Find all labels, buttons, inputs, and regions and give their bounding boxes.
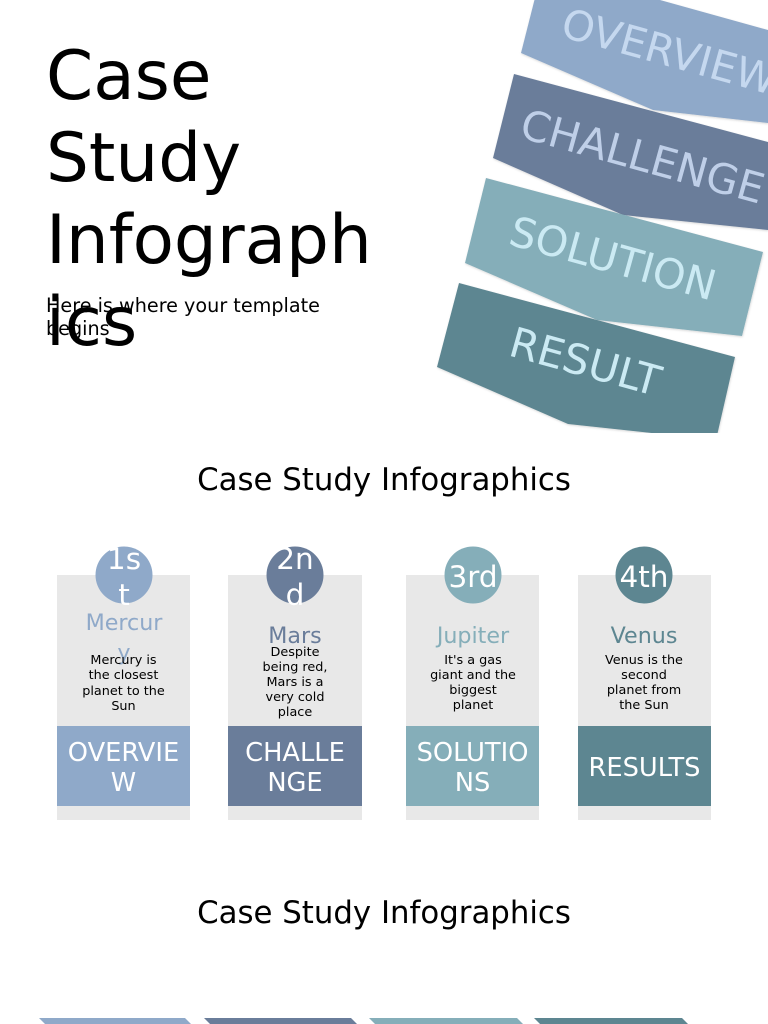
circle: 4th bbox=[616, 546, 672, 604]
ribbon: solution: SOLUTION bbox=[504, 206, 721, 310]
bottom tab: result bbox=[534, 1018, 694, 1024]
text: Mercury description: planet to the bbox=[82, 684, 165, 699]
bottom tab: overview bbox=[39, 1018, 197, 1024]
text: Mars description bbox=[263, 645, 327, 720]
text: Venus description: planet from bbox=[607, 683, 681, 698]
heading: first section: Case Study Infographics bbox=[197, 462, 571, 498]
title: Study bbox=[46, 118, 241, 197]
circle: 2nd: d bbox=[286, 578, 304, 612]
ribbon: solution bbox=[465, 178, 763, 336]
text: Mars description: Despite bbox=[271, 645, 320, 660]
band: challenge: CHALLE bbox=[245, 738, 345, 768]
name: Mercury bbox=[86, 610, 163, 666]
ribbon: result: RESULT bbox=[504, 317, 667, 406]
text: Venus description: the Sun bbox=[619, 698, 669, 713]
card: overview bbox=[57, 542, 190, 820]
band: challenge bbox=[228, 726, 362, 806]
text: Jupiter description: biggest bbox=[449, 683, 497, 698]
bottom tab: challenge bbox=[204, 1018, 363, 1024]
text: Venus description: second bbox=[621, 668, 667, 683]
band: solutions: NS bbox=[455, 768, 490, 798]
text: Mars description: Mars is a bbox=[266, 675, 324, 690]
card: challenge bbox=[228, 542, 362, 820]
name: Jupiter: Jupiter bbox=[435, 623, 510, 649]
title: Infograph bbox=[46, 200, 372, 279]
subtitle: Here is where your template bbox=[46, 294, 320, 317]
name: Venus: Venus bbox=[611, 623, 677, 649]
circle: 3rd: 3rd bbox=[448, 560, 498, 594]
text: Mars description: very cold bbox=[266, 690, 324, 705]
name: Mercury: y bbox=[117, 640, 131, 666]
bottom tab: solution bbox=[369, 1018, 529, 1024]
title: ics bbox=[46, 282, 137, 361]
title bbox=[46, 36, 372, 361]
card: solutions bbox=[406, 546, 539, 820]
text: Jupiter description: giant and the bbox=[430, 668, 516, 683]
ribbon: challenge bbox=[493, 74, 768, 230]
subtitle: begins bbox=[46, 317, 110, 340]
ribbon: result bbox=[437, 283, 735, 440]
text: Mercury description: the closest bbox=[89, 668, 158, 683]
band: overview: W bbox=[111, 768, 136, 798]
text: Venus description bbox=[605, 653, 683, 713]
circle: 3rd bbox=[444, 546, 502, 604]
text: Mars description: place bbox=[278, 705, 312, 720]
ribbon: challenge: CHALLENGE bbox=[515, 99, 768, 214]
band: results: RESULTS bbox=[589, 753, 700, 783]
band: challenge: NGE bbox=[267, 768, 323, 798]
text: Mercury description: Mercury is bbox=[90, 653, 157, 668]
text: Jupiter description: planet bbox=[453, 698, 493, 713]
heading: second section: Case Study Infographics bbox=[197, 895, 571, 931]
circle: 4th: 4th bbox=[619, 560, 669, 594]
title: Case bbox=[46, 36, 211, 115]
subtitle bbox=[46, 294, 320, 340]
text: Jupiter description bbox=[430, 653, 516, 713]
band: solutions bbox=[406, 726, 539, 806]
circle: 1st bbox=[96, 542, 152, 612]
text: Mercury description: Sun bbox=[111, 699, 136, 714]
band: results bbox=[578, 726, 711, 806]
band: overview bbox=[57, 726, 190, 806]
text: Mercury description bbox=[82, 653, 165, 714]
circle: 1st: 1s bbox=[107, 542, 141, 576]
name: Mars: Mars bbox=[268, 623, 322, 649]
text: Venus description: Venus is the bbox=[605, 653, 683, 668]
circle: 1st: t bbox=[118, 578, 130, 612]
band: overview: OVERVIE bbox=[68, 738, 179, 768]
ribbon menu bbox=[437, 0, 768, 440]
text: Mars description: being red, bbox=[263, 660, 327, 675]
card: results bbox=[578, 546, 711, 820]
name: Mercury: Mercur bbox=[86, 610, 163, 636]
circle: 2nd bbox=[266, 542, 324, 612]
text: Jupiter description: It's a gas bbox=[444, 653, 502, 668]
circle: 2nd: 2n bbox=[276, 542, 314, 576]
band: solutions: SOLUTIO bbox=[417, 738, 528, 768]
